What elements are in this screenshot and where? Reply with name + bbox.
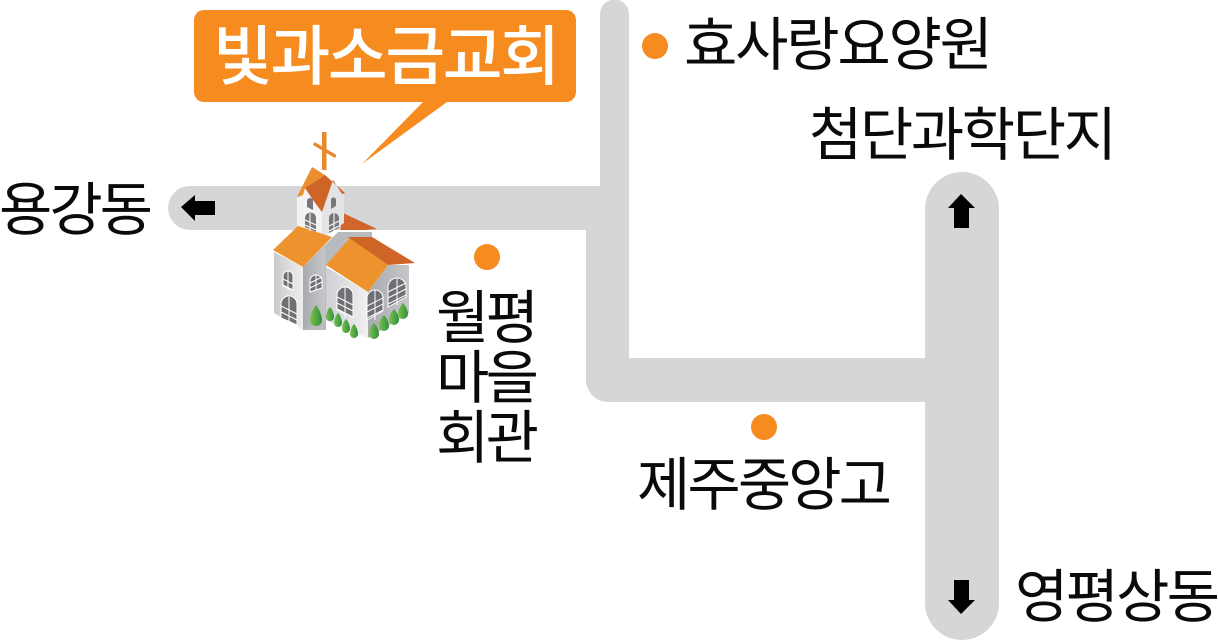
marker: village hall [474,244,500,270]
trees [310,303,408,339]
connector wall [303,232,372,330]
white patch behind nave [330,230,372,238]
line 1: 월평 [436,286,539,351]
tower walls [297,188,322,238]
cross [313,132,336,170]
label: Yonggang-dong: 용강동 [0,178,153,243]
label: science park: 첨단과학단지 [809,103,1117,168]
arrow: west [181,195,215,221]
left block walls [274,252,303,330]
nave side wall [368,265,409,338]
line 3: 회관 [436,406,539,471]
arrow: north [948,194,975,228]
callout bubble [194,10,576,164]
icon: church [273,132,415,339]
tower windows [305,198,339,233]
tower roof [297,167,325,197]
nave front wall [326,267,368,338]
label: nursing home: 효사랑요양원 [684,13,993,78]
church windows [281,271,406,325]
window bars [281,213,406,326]
label: Yeongpyeong-sang-dong: 영평상동 [1015,565,1218,630]
line 2: 마을 [436,346,539,411]
callout title: 빛과소금교회 [213,20,560,93]
arrow: south [948,580,975,614]
label: school: 제주중앙고 [637,453,892,518]
marker: nursing home [642,33,668,59]
callout [194,10,576,164]
marker: school [751,414,777,440]
nave roof [326,238,388,292]
roads [168,0,999,640]
left block roof [273,226,332,267]
road: north-south [925,172,999,640]
road: west to north and east [168,0,925,402]
back roof [340,213,377,232]
label: village hall [436,286,539,471]
